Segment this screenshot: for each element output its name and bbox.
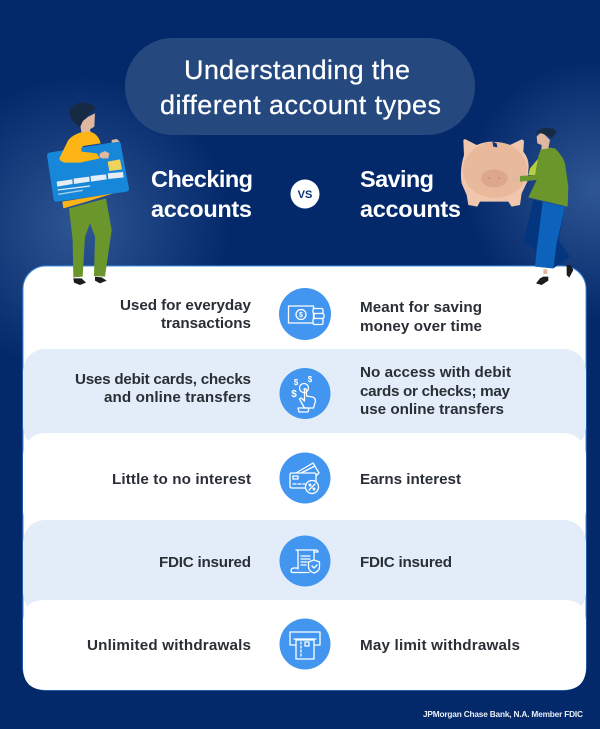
row 3 text — [112, 471, 461, 488]
near leg — [535, 202, 565, 268]
title: Understanding the — [184, 55, 410, 85]
heading: saving accounts — [360, 166, 461, 222]
hair — [69, 103, 96, 127]
snout — [481, 169, 508, 187]
card stripes — [57, 172, 124, 187]
vs badge: VS — [298, 189, 312, 201]
row 2 text: cards or checks; may — [360, 383, 511, 400]
hands — [99, 139, 120, 158]
row 2 text: and online transfers — [104, 389, 251, 406]
piggy face — [463, 142, 527, 198]
shoes — [536, 265, 573, 285]
icon: hand tapping money: $ — [291, 389, 297, 400]
vs badge — [290, 180, 320, 208]
title pill — [125, 38, 475, 135]
footer credit: JPMorgan Chase Bank, N.A. Member FDIC — [423, 709, 583, 719]
row 1 text: money over time — [360, 318, 482, 335]
figure: person holding credit card — [47, 103, 129, 285]
heading: checking accounts: Checking — [151, 166, 253, 192]
trousers — [69, 198, 112, 277]
comparison panel — [23, 266, 586, 690]
row 1 text: Used for everyday — [120, 297, 252, 314]
heading: saving accounts: Saving — [360, 166, 434, 192]
row 5 text: Unlimited withdrawals — [87, 637, 251, 654]
icon: ATM card slot — [280, 618, 330, 670]
heading: checking accounts: accounts — [151, 196, 252, 222]
coin slot — [492, 142, 497, 147]
title line two: different account types — [160, 90, 441, 120]
icon: cash and coins: $ — [299, 312, 303, 319]
shirt bottom — [62, 193, 113, 208]
row 2 text: No access with debit — [360, 364, 511, 381]
heading: saving accounts: accounts — [360, 196, 461, 222]
row 2 text — [75, 364, 511, 418]
icon: hand tapping money — [280, 368, 330, 419]
row 5 text — [87, 637, 520, 654]
ankle — [543, 269, 547, 274]
icon: hand tapping money: $ — [308, 375, 313, 384]
sweater and arm — [59, 132, 101, 163]
icon: cards with percent — [280, 452, 330, 504]
icon: cash and coins — [279, 288, 331, 340]
heading: checking accounts — [151, 166, 253, 222]
row 4 text: FDIC insured — [159, 554, 251, 571]
row 5 text: May limit withdrawals — [360, 637, 520, 654]
row 4 text: FDIC insured — [360, 554, 452, 571]
far leg — [523, 200, 570, 268]
row 2 text: Uses debit cards, checks — [75, 371, 251, 388]
row 1 text: Meant for saving — [360, 299, 482, 316]
row 1 text: transactions — [161, 315, 251, 332]
figure: person holding piggy bank — [461, 128, 573, 285]
piggy bank body — [461, 139, 529, 207]
lime shirt — [528, 158, 538, 175]
row 1 text — [120, 297, 482, 335]
row 2 text: use online transfers — [360, 401, 504, 418]
chip — [108, 159, 122, 171]
credit card — [47, 142, 129, 202]
icon: hand tapping money: $ — [294, 378, 299, 387]
icon: insured document with shield — [280, 536, 330, 586]
shoes — [73, 277, 107, 285]
green sweater — [520, 147, 568, 207]
head and neck — [537, 132, 550, 149]
row 3 text: Earns interest — [360, 471, 461, 488]
hand — [512, 176, 520, 182]
row 4 text — [159, 554, 452, 571]
row 3 text: Little to no interest — [112, 471, 251, 488]
hair — [536, 128, 557, 138]
face and neck — [80, 113, 95, 134]
